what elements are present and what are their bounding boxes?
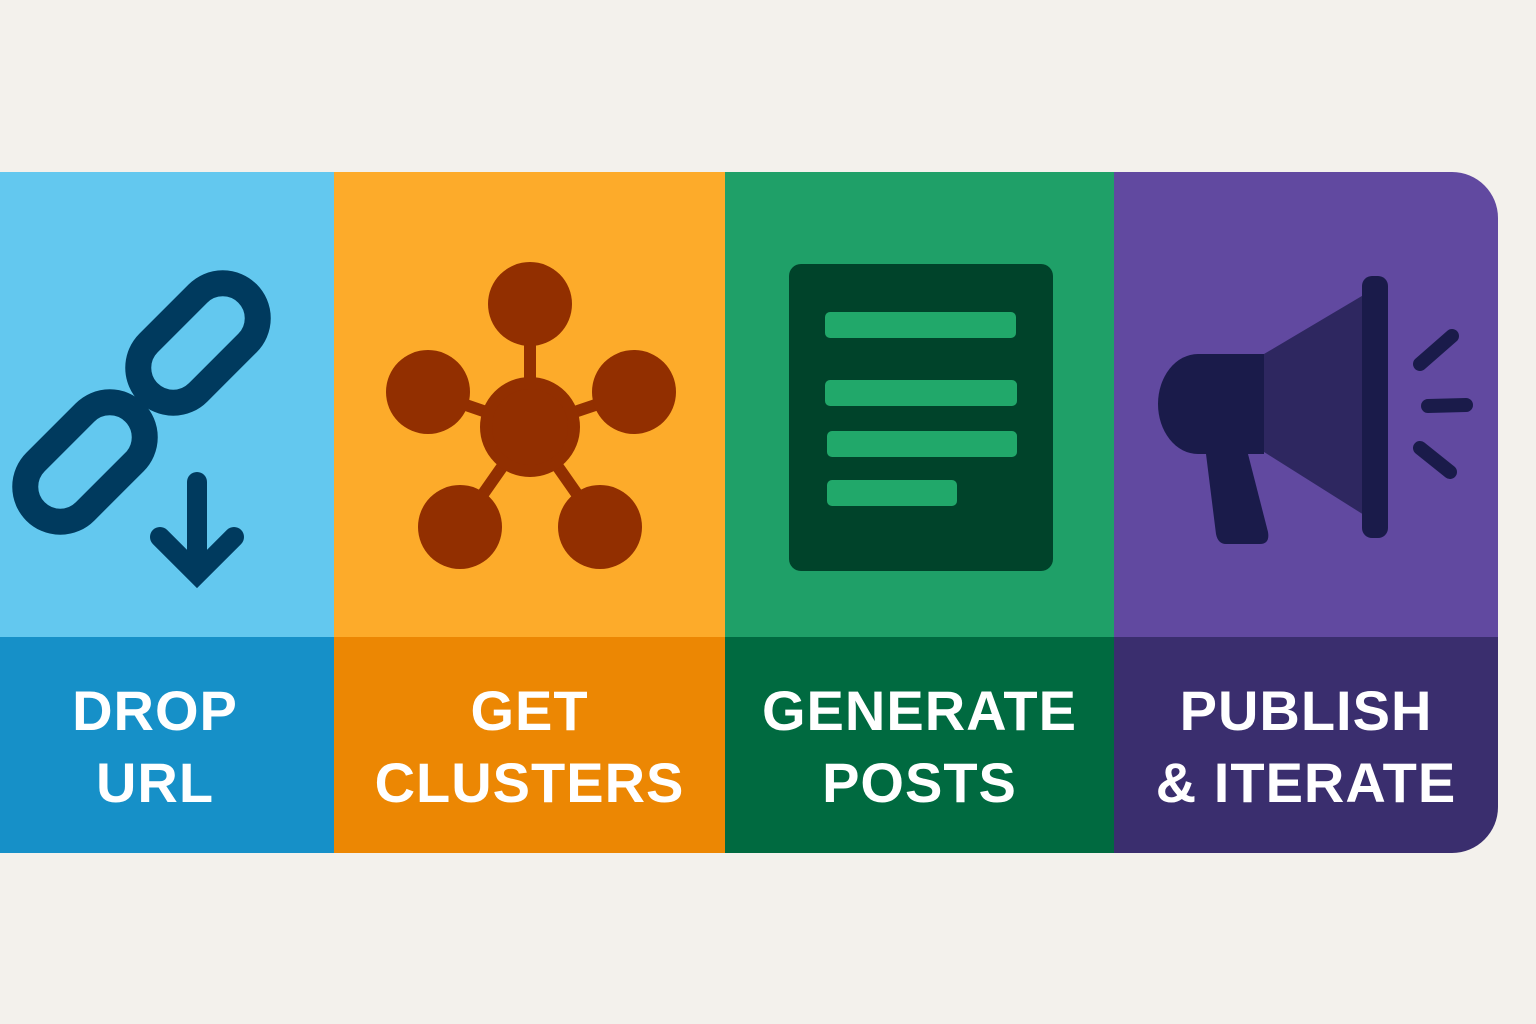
panel: drop url: [0, 172, 334, 853]
label: drop url: [0, 637, 334, 853]
label: generate posts: [725, 637, 1114, 853]
label: publish & iterate: & ITERATE: [1156, 751, 1456, 814]
label: drop url: URL: [96, 751, 214, 814]
panel: get clusters: [334, 172, 725, 853]
label: publish & iterate: PUBLISH: [1180, 679, 1432, 742]
process band: [0, 172, 1498, 853]
label: get clusters: [334, 637, 725, 853]
icon: chain link with arrow: [12, 270, 271, 588]
icon: cluster network: [386, 262, 676, 569]
label: generate posts: GENERATE: [762, 679, 1077, 742]
label: drop url: DROP: [72, 679, 238, 742]
label: get clusters: GET: [470, 679, 589, 742]
panel: publish & iterate: [1114, 172, 1498, 853]
icon: megaphone: [1158, 276, 1473, 544]
label: get clusters: CLUSTERS: [375, 751, 684, 814]
label: publish & iterate: [1114, 637, 1498, 853]
icon: document: [789, 264, 1053, 571]
label: generate posts: POSTS: [822, 751, 1017, 814]
panel: generate posts: [725, 172, 1114, 853]
